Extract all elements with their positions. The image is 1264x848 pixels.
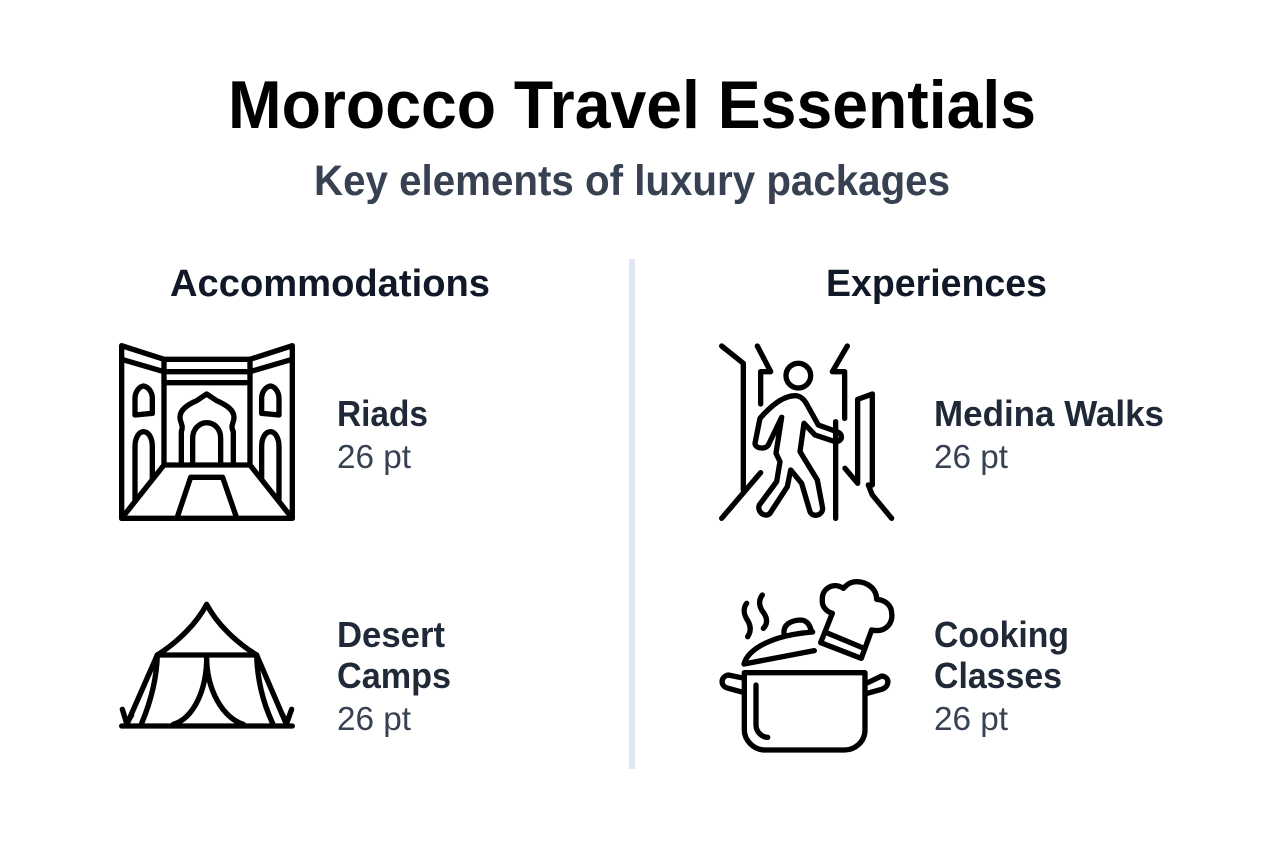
item: cooking classes — [934, 614, 1069, 737]
item: riads: Riads — [337, 393, 428, 434]
item: cooking classes: Classes — [934, 655, 1062, 696]
item: medina walks: Medina Walks — [934, 393, 1164, 434]
icon: riad courtyard — [122, 346, 292, 518]
heading: accommodations: Accommodations — [170, 263, 490, 305]
item: riads — [337, 393, 428, 475]
icon: medina walker — [722, 346, 892, 518]
icon: cooking pot and chef hat — [722, 582, 892, 750]
heading: experiences: Experiences — [826, 263, 1047, 305]
item: desert camps: Desert — [337, 614, 445, 655]
item: desert camps: Camps — [337, 655, 451, 696]
item: riads: 26 pt — [337, 438, 411, 475]
item: desert camps — [337, 614, 451, 737]
subtitle: Key elements of luxury packages — [314, 157, 950, 205]
panel: experiences — [722, 263, 1164, 750]
item: cooking classes: Cooking — [934, 614, 1069, 655]
title: Morocco Travel Essentials — [228, 67, 1036, 143]
item: medina walks — [934, 393, 1164, 475]
column divider — [629, 259, 635, 769]
item: cooking classes: 26 pt — [934, 700, 1008, 737]
item: desert camps: 26 pt — [337, 700, 411, 737]
icon: desert tent — [122, 604, 292, 726]
item: medina walks: 26 pt — [934, 438, 1008, 475]
panel: accommodations — [122, 263, 490, 737]
